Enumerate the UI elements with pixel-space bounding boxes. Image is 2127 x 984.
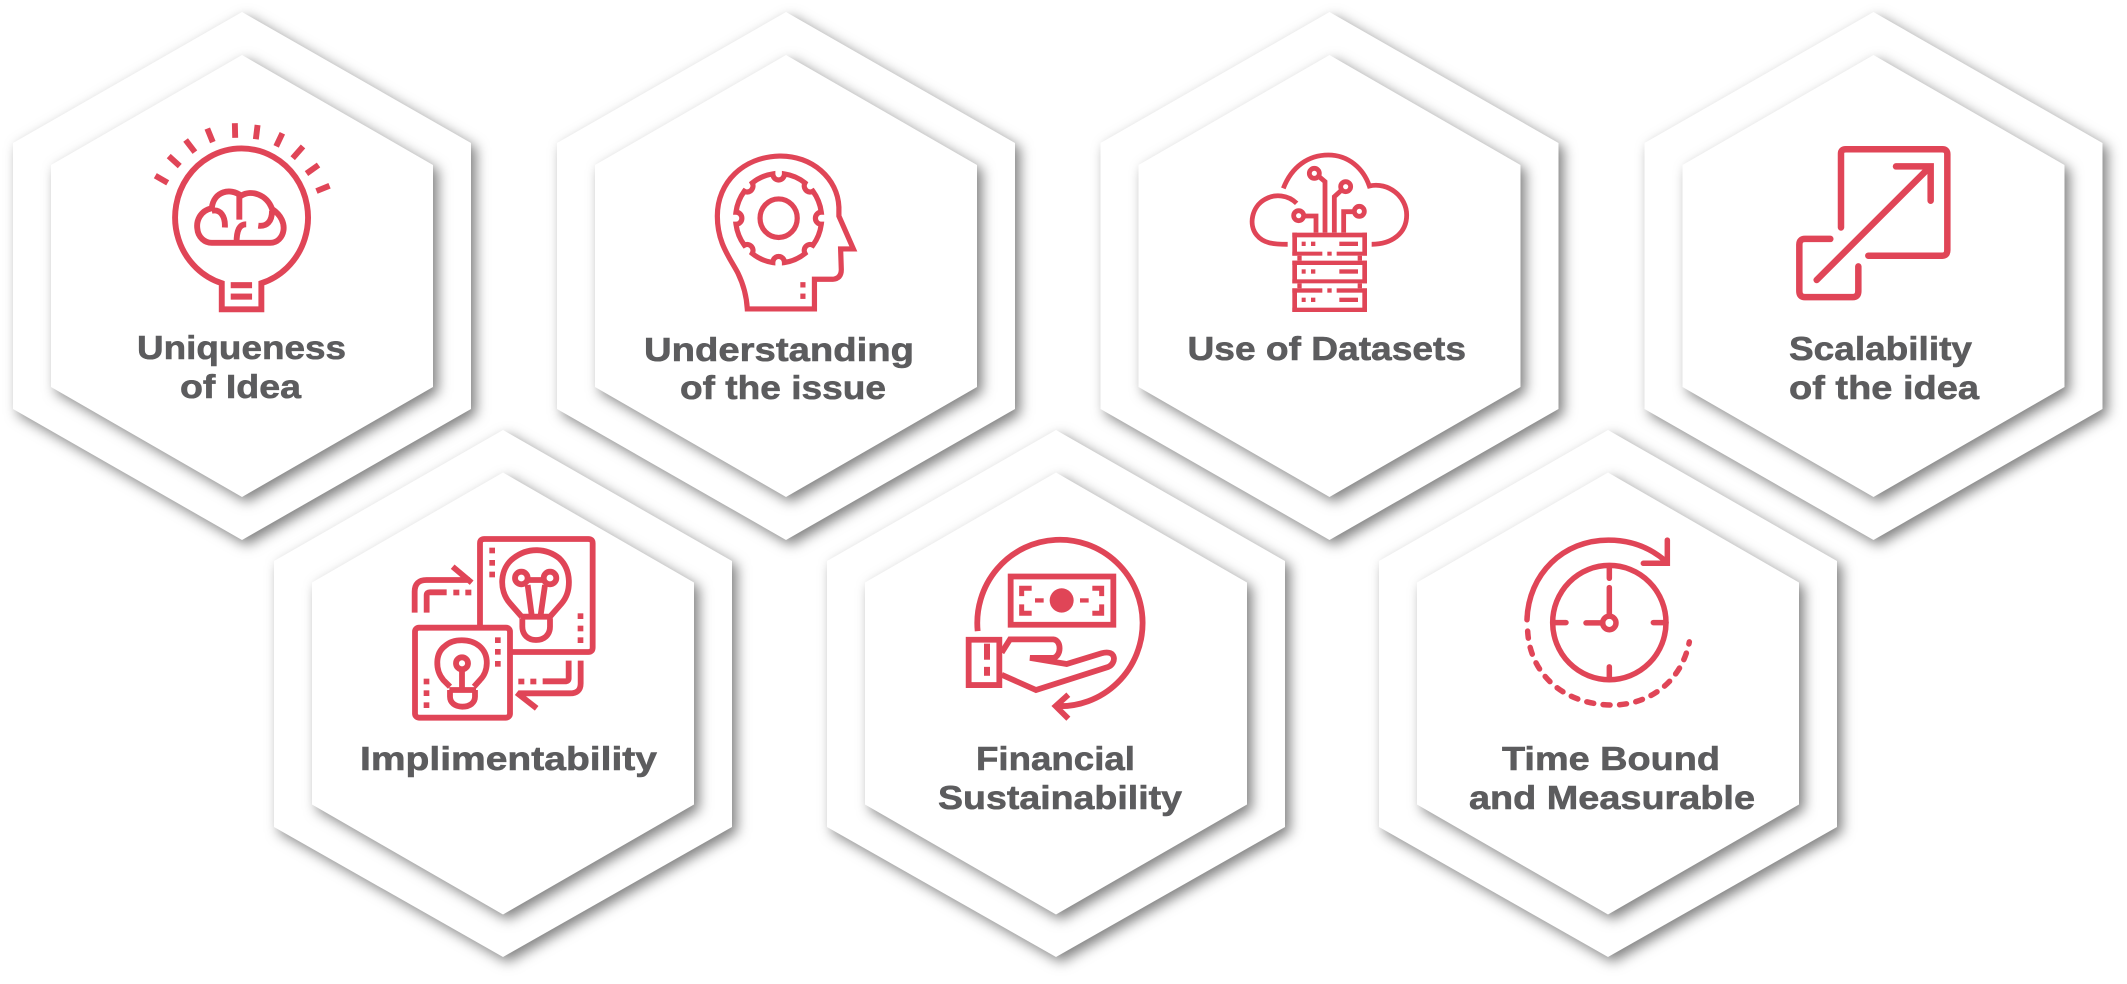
outer hexagon xyxy=(274,430,732,957)
label: and Measurable xyxy=(1469,780,1755,817)
panel: Uniqueness of Idea xyxy=(13,12,471,540)
outer hexagon xyxy=(1100,12,1558,540)
label: Scalability xyxy=(1789,331,1972,368)
outer hexagon xyxy=(827,430,1285,957)
icon: head with gear xyxy=(717,156,853,309)
inner hexagon xyxy=(1417,472,1799,914)
panel: Financial Sustainability xyxy=(827,430,1285,957)
label: Implimentability xyxy=(360,741,657,778)
label: of the idea xyxy=(1789,370,1979,407)
label: of the issue xyxy=(680,370,886,407)
label: Sustainability xyxy=(938,780,1182,817)
inner hexagon xyxy=(595,55,977,497)
panel: Implimentability xyxy=(274,430,732,957)
label: Time Bound xyxy=(1502,741,1720,778)
icon: light bulb with brain xyxy=(155,123,330,309)
outer hexagon xyxy=(557,12,1015,540)
outer hexagon xyxy=(1644,12,2102,540)
inner hexagon xyxy=(865,472,1247,914)
outer hexagon xyxy=(13,12,471,540)
panel: Use of Datasets xyxy=(1100,12,1558,540)
outer hexagon xyxy=(1379,430,1837,957)
label: Use of Datasets xyxy=(1188,331,1466,368)
inner hexagon xyxy=(312,472,694,914)
inner hexagon xyxy=(1682,55,2064,497)
label xyxy=(137,330,346,406)
icon: two bulb cards with cycle arrows xyxy=(415,539,593,718)
icon: cloud and server stack xyxy=(1252,155,1407,312)
label: Understanding xyxy=(644,332,914,369)
icon: hand holding banknote in circular arrow xyxy=(969,540,1143,719)
inner hexagon xyxy=(51,55,433,497)
icon: scale-up arrow squares xyxy=(1799,149,1947,297)
inner hexagon xyxy=(1138,55,1520,497)
panel: Understanding of the issue xyxy=(557,12,1015,540)
label xyxy=(1789,331,1979,407)
label: Uniqueness xyxy=(137,330,346,367)
panel: Scalability of the idea xyxy=(1644,12,2102,540)
panel: Time Bound and Measurable xyxy=(1379,430,1837,957)
label xyxy=(938,741,1182,817)
label xyxy=(1469,741,1755,817)
icon: clock with circular arrow xyxy=(1527,540,1689,705)
label xyxy=(644,332,914,407)
label: of Idea xyxy=(180,369,301,406)
label: Financial xyxy=(976,741,1135,778)
